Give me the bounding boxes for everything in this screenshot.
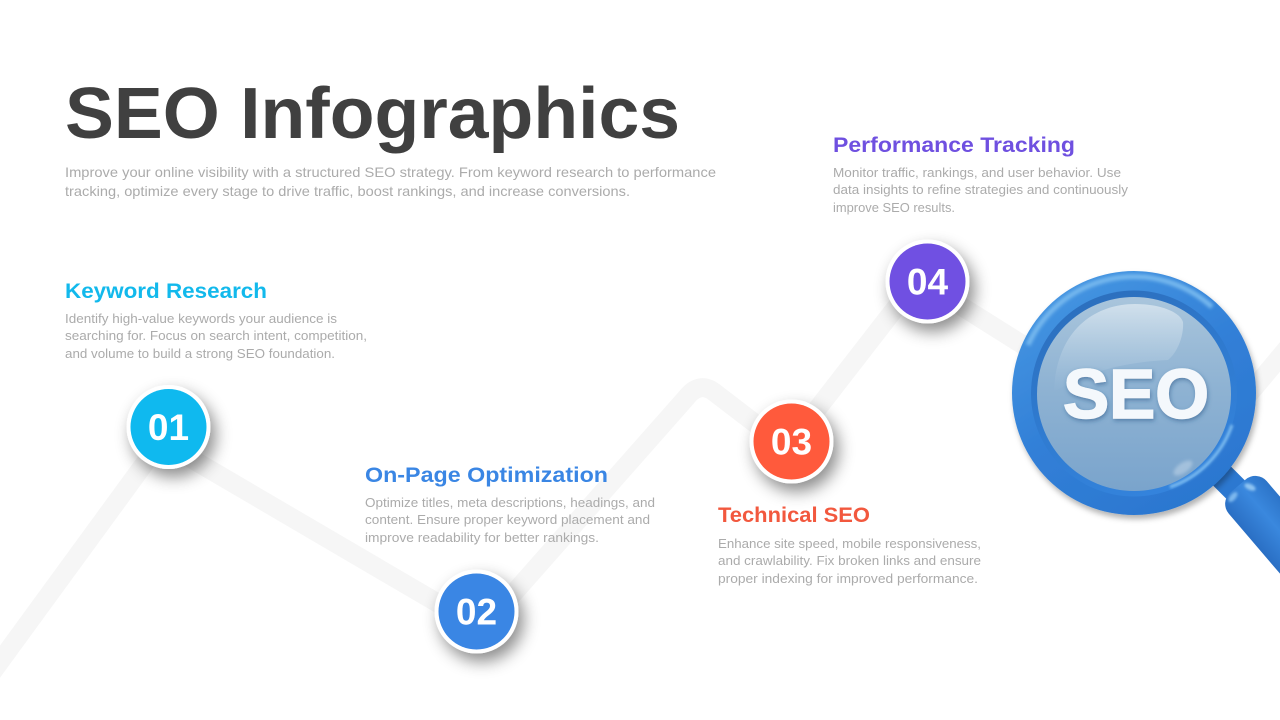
text: performance tracking description: improve SEO results. xyxy=(833,200,955,215)
heading: on-page optimization: On-Page Optimization xyxy=(365,463,608,487)
text: on-page description: improve readability for better rankings. xyxy=(365,530,599,545)
text: performance tracking description: data insights to refine strategies and continuously xyxy=(833,182,1129,197)
text: performance tracking description xyxy=(833,165,1129,215)
title: SEO Infographics xyxy=(65,74,680,154)
text: on-page description: content. Ensure proper keyword placement and xyxy=(365,512,650,527)
text: on-page description xyxy=(365,495,655,545)
text: keyword research description: and volume to build a strong SEO foundation. xyxy=(65,346,335,361)
panel: on-page optimization xyxy=(365,463,655,545)
step badge 03 xyxy=(750,400,834,484)
step badge 04: 04 xyxy=(907,262,948,302)
heading: technical seo: Technical SEO xyxy=(718,503,870,527)
step badge 04 xyxy=(886,240,970,324)
intro text xyxy=(65,164,716,199)
text: keyword research description xyxy=(65,311,367,361)
text: technical seo description: proper indexing for improved performance. xyxy=(718,571,978,586)
text: technical seo description xyxy=(718,536,981,586)
panel: technical seo xyxy=(718,503,981,586)
step badge 02: 02 xyxy=(456,592,497,632)
heading: keyword research: Keyword Research xyxy=(65,279,267,303)
intro text: Improve your online visibility with a structured SEO strategy. From keyword research to performance xyxy=(65,164,716,180)
background zigzag path xyxy=(0,279,1280,689)
magnifier handle xyxy=(1205,459,1280,601)
step badge 01 xyxy=(126,385,210,469)
panel: performance tracking xyxy=(833,133,1129,215)
magnifier ring xyxy=(1012,271,1256,515)
icon: seo magnifying glass xyxy=(1012,271,1280,601)
text: keyword research description: Identify high-value keywords your audience is xyxy=(65,311,338,326)
step badge 01: 01 xyxy=(148,407,189,448)
seo lens text: SEO xyxy=(1063,355,1209,433)
intro text: tracking, optimize every stage to drive traffic, boost rankings, and increase conversions. xyxy=(65,183,630,199)
step badge 03: 03 xyxy=(771,422,812,462)
text: keyword research description: searching for. Focus on search intent, competition, xyxy=(65,328,367,343)
magnifier lens xyxy=(1037,297,1231,491)
text: technical seo description: and crawlability. Fix broken links and ensure xyxy=(718,553,981,568)
panel: keyword research xyxy=(65,279,367,361)
text: on-page description: Optimize titles, meta descriptions, headings, and xyxy=(365,495,655,510)
text: performance tracking description: Monitor traffic, rankings, and user behavior. Use xyxy=(833,165,1121,180)
lens highlight xyxy=(1054,304,1183,392)
heading: performance tracking: Performance Tracking xyxy=(833,133,1075,157)
text: technical seo description: Enhance site speed, mobile responsiveness, xyxy=(718,536,981,551)
step badge 02 xyxy=(434,570,518,654)
